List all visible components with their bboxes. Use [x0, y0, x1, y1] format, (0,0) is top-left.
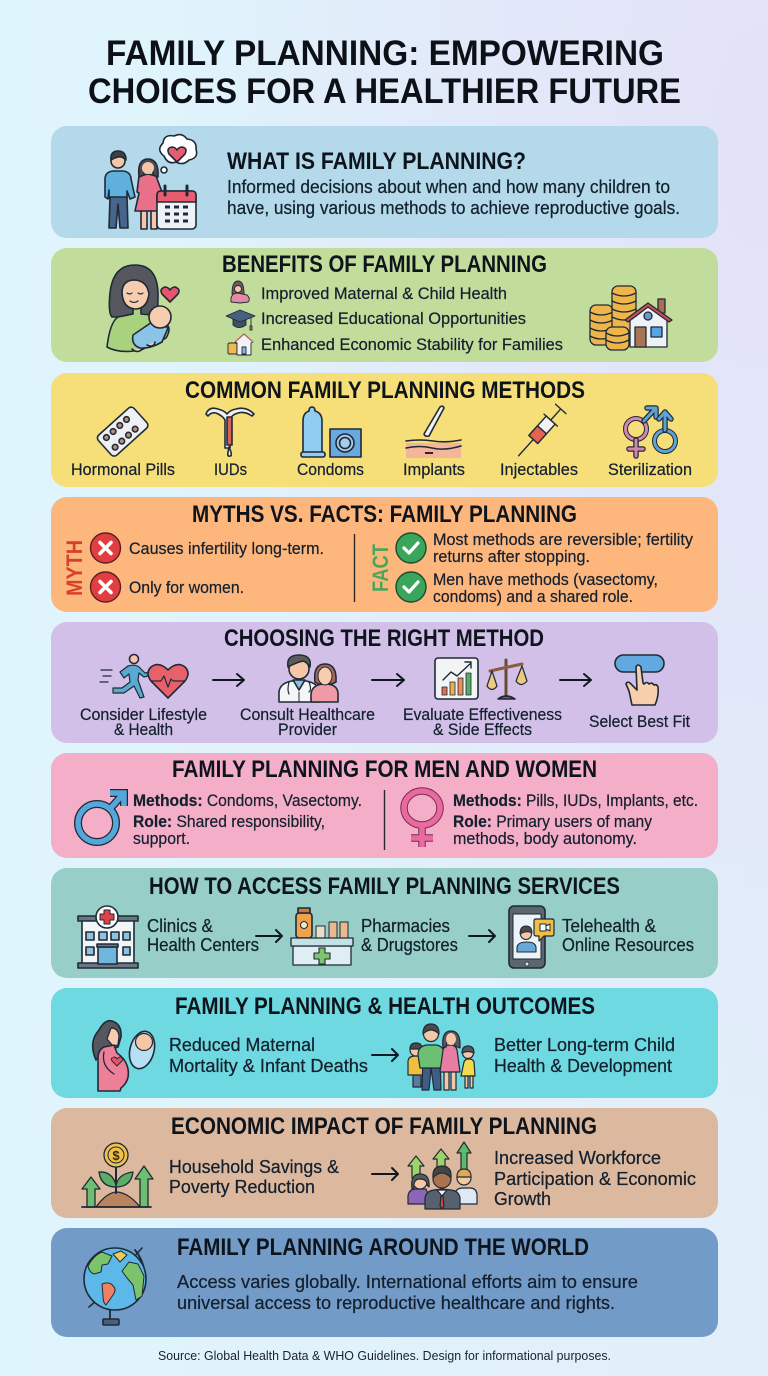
icon: mother mini	[231, 281, 249, 303]
economic: workforce growth: Participation & Economic	[494, 1168, 696, 1189]
method: condoms: Condoms	[297, 460, 364, 479]
arrow	[213, 674, 244, 686]
outcome: maternal and infant: Mortality & Infant Deaths	[169, 1055, 368, 1076]
arrow	[560, 674, 591, 686]
benefit list: Improved Maternal & Child Health	[261, 284, 507, 303]
panel: what is family planning	[51, 126, 718, 238]
heading: COMMON FAMILY PLANNING METHODS	[185, 377, 585, 404]
fact column: Men have methods (vasectomy,	[433, 570, 658, 589]
method: injectables	[500, 403, 578, 479]
description: Informed decisions about when and how many children to	[227, 176, 670, 197]
heading: FAMILY PLANNING FOR MEN AND WOMEN	[172, 756, 597, 783]
fact column: Most methods are reversible; fertility	[433, 530, 693, 549]
myth label: MYTH	[62, 540, 87, 596]
outcome: maternal and infant: Reduced Maternal	[169, 1034, 315, 1055]
economic: household savings: Household Savings &	[169, 1156, 340, 1177]
step: lifestyle and health: Consider Lifestyle	[80, 705, 207, 724]
heading: FAMILY PLANNING & HEALTH OUTCOMES	[175, 993, 595, 1020]
economic: household savings	[82, 1143, 340, 1207]
method: implants	[403, 406, 465, 479]
outcome: child development: Better Long-term Child	[494, 1034, 675, 1055]
method: sterilization: Sterilization	[608, 460, 692, 479]
icon: graduation cap	[226, 310, 255, 330]
fact column: condoms) and a shared role.	[433, 587, 633, 606]
men column	[78, 791, 362, 848]
women column: Methods: Pills, IUDs, Implants, etc.	[453, 791, 698, 810]
panel: men and women	[51, 753, 718, 858]
description	[177, 1271, 638, 1313]
benefit list: Enhanced Economic Stability for Families	[261, 335, 563, 354]
arrow	[256, 930, 282, 942]
arrow	[469, 930, 495, 942]
step: telehealth: Online Resources	[562, 934, 694, 955]
heading: HOW TO ACCESS FAMILY PLANNING SERVICES	[149, 873, 620, 900]
method: sterilization	[608, 408, 692, 479]
panel: benefits	[51, 248, 718, 362]
icon: couple with calendar and heart thought	[105, 135, 197, 229]
panel: health outcomes	[51, 988, 718, 1098]
economic: workforce growth: Growth	[494, 1188, 551, 1209]
step: pharmacies: Pharmacies	[361, 915, 450, 936]
women column: methods, body autonomy.	[453, 829, 637, 848]
arrow	[372, 1049, 398, 1061]
step: telehealth	[509, 906, 694, 968]
method: IUD: IUDs	[214, 460, 247, 479]
title: CHOICES FOR A HEALTHIER FUTURE	[88, 72, 681, 111]
method: IUD	[206, 408, 254, 479]
outcome: child development: Health & Development	[494, 1055, 672, 1076]
men column: support.	[133, 829, 190, 848]
fact column: returns after stopping.	[433, 547, 590, 566]
panel: choosing the right method	[51, 622, 718, 743]
step: evaluate effectiveness: & Side Effects	[433, 720, 532, 739]
heading: CHOOSING THE RIGHT METHOD	[224, 625, 544, 652]
men column: Role: Shared responsibility,	[133, 812, 325, 831]
arrow	[372, 1168, 398, 1180]
step: select best fit	[589, 655, 690, 731]
women column: Role: Primary users of many	[453, 812, 652, 831]
arrow	[372, 674, 404, 686]
panel: myths vs facts	[51, 497, 718, 612]
method: implants: Implants	[403, 460, 465, 479]
step: select best fit: Select Best Fit	[589, 712, 690, 731]
step: pharmacies: & Drugstores	[361, 934, 458, 955]
icon: female symbol	[404, 791, 440, 847]
economic: household savings: $	[112, 1148, 120, 1163]
men column: Methods: Condoms, Vasectomy.	[133, 791, 362, 810]
step: evaluate effectiveness: Evaluate Effectiveness	[403, 705, 562, 724]
step: clinics: Clinics &	[147, 915, 214, 936]
panel: around the world	[51, 1228, 718, 1337]
heading: ECONOMIC IMPACT OF FAMILY PLANNING	[171, 1113, 597, 1140]
heading: WHAT IS FAMILY PLANNING?	[227, 148, 526, 175]
icon: mother and baby	[107, 265, 179, 352]
panel: economic impact	[51, 1108, 718, 1218]
description: have, using various methods to achieve reproductive goals.	[227, 197, 680, 218]
description: Access varies globally. International efforts aim to ensure	[177, 1271, 638, 1292]
title	[88, 34, 681, 111]
myth column	[62, 533, 324, 602]
icon: coins and house	[590, 286, 672, 350]
icon: myth cross 1	[90, 533, 120, 563]
step: telehealth: Telehealth &	[562, 915, 657, 936]
step: pharmacies	[291, 908, 458, 965]
icon: male symbol	[78, 793, 124, 842]
myth column: Only for women.	[129, 578, 244, 597]
description	[227, 176, 680, 218]
icon: fact check 2	[396, 572, 426, 602]
economic: workforce growth: Increased Workforce	[494, 1147, 661, 1168]
benefit list: Increased Educational Opportunities	[261, 309, 526, 328]
description: universal access to reproductive healthcare and rights.	[177, 1292, 615, 1313]
method: hormonal pills	[71, 406, 175, 479]
title: FAMILY PLANNING: EMPOWERING	[106, 34, 664, 73]
economic: workforce growth	[408, 1142, 696, 1209]
heading: FAMILY PLANNING AROUND THE WORLD	[177, 1234, 589, 1261]
step: clinics	[78, 906, 259, 968]
myth column: Causes infertility long-term.	[129, 539, 324, 558]
step: evaluate effectiveness	[403, 658, 562, 739]
icon: myth cross 2	[90, 572, 120, 602]
heading: MYTHS VS. FACTS: FAMILY PLANNING	[192, 501, 577, 528]
method: injectables: Injectables	[500, 460, 578, 479]
panel: methods	[51, 373, 718, 487]
heading: BENEFITS OF FAMILY PLANNING	[222, 251, 547, 278]
women column	[404, 791, 698, 848]
method: hormonal pills: Hormonal Pills	[71, 460, 175, 479]
panel: access services	[51, 868, 718, 978]
fact column	[368, 530, 693, 606]
step: lifestyle and health: & Health	[114, 720, 173, 739]
step: consult provider	[240, 655, 375, 739]
icon: coins and house mini	[228, 334, 253, 355]
step: consult provider: Provider	[278, 720, 337, 739]
method: condoms	[297, 407, 364, 479]
step: lifestyle and health	[80, 654, 207, 739]
step: consult provider: Consult Healthcare	[240, 705, 375, 724]
step: clinics: Health Centers	[147, 934, 259, 955]
icon: globe	[84, 1248, 146, 1325]
benefit list	[226, 281, 563, 355]
outcome: maternal and infant	[93, 1021, 368, 1091]
economic: household savings: Poverty Reduction	[169, 1176, 315, 1197]
source footer: Source: Global Health Data & WHO Guidelines. Design for informational purposes.	[158, 1349, 611, 1363]
icon: fact check 1	[396, 533, 426, 563]
fact label: FACT	[368, 544, 393, 592]
outcome: child development	[408, 1024, 675, 1090]
